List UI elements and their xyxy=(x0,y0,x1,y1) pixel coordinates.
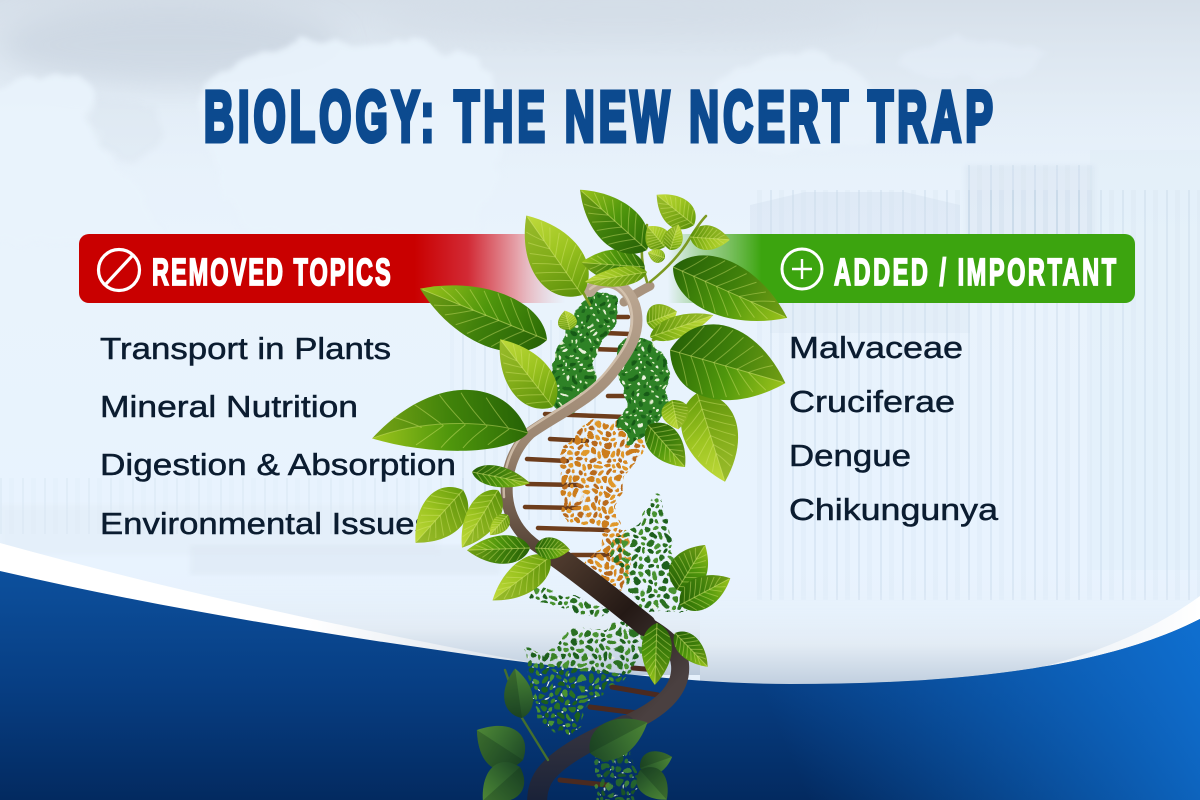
added topics list xyxy=(789,330,999,527)
removed topics list: Transport in Plants xyxy=(100,331,391,366)
added topics header bar xyxy=(668,234,1135,303)
removed topics header bar xyxy=(79,234,565,303)
leaves: right side xyxy=(636,298,796,490)
foliage cluster: green upper xyxy=(551,292,668,445)
removed topics list: Digestion & Absorption xyxy=(100,447,456,482)
foliage cluster: orange xyxy=(559,421,645,590)
added topics list: Chikungunya xyxy=(789,492,999,527)
panel: removed topics xyxy=(79,234,565,541)
helix strand, far side xyxy=(624,286,650,302)
added topics list: Malvaceae xyxy=(789,330,963,365)
leaves: left side xyxy=(371,388,571,614)
leaves: reflected dark leaves in the blue footer xyxy=(464,667,678,800)
icon: prohibited sign xyxy=(98,250,140,290)
removed topics list: Mineral Nutrition xyxy=(100,389,358,424)
blue wave footer xyxy=(0,571,1200,800)
removed topics list xyxy=(100,331,456,541)
illustration: DNA helix growing leaves xyxy=(371,174,799,800)
foliage cluster: green sprigs xyxy=(522,490,702,800)
white swoosh above the blue wave xyxy=(0,543,1200,686)
added topics heading: ADDED / IMPORTANT xyxy=(834,250,1116,293)
leaves: upper crown xyxy=(409,174,799,421)
stems xyxy=(505,216,706,760)
panel: added / important topics xyxy=(668,234,1135,527)
removed topics list: Environmental Issues xyxy=(100,506,432,541)
removed topics heading: REMOVED TOPICS xyxy=(152,250,391,293)
helix strand, front xyxy=(504,282,680,800)
title: BIOLOGY: THE NEW NCERT TRAP xyxy=(204,77,993,157)
leaves: lower right xyxy=(640,535,737,686)
icon: plus sign xyxy=(782,249,822,289)
added topics list: Dengue xyxy=(789,438,911,473)
added topics list: Cruciferae xyxy=(789,384,955,419)
helix rungs xyxy=(525,317,658,785)
